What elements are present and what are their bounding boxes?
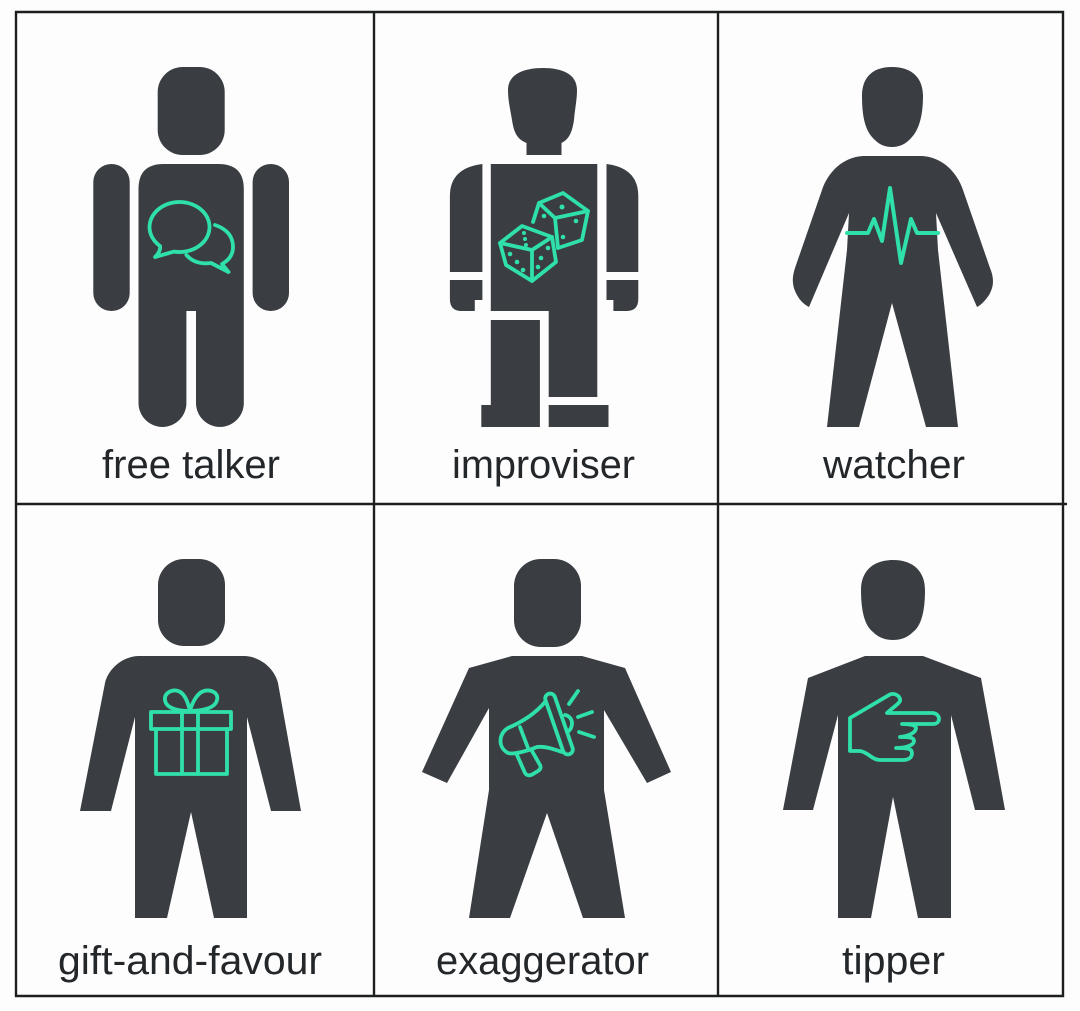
panel: gift-and-favour: [17, 505, 373, 995]
figure: gift-and-favour silhouette: [80, 559, 301, 918]
figure: tipper silhouette: [783, 560, 1005, 918]
label: watcher: watcher: [822, 443, 965, 487]
figure: free talker silhouette: [93, 67, 289, 427]
icon: pointing hand: [850, 694, 939, 760]
panel: watcher: [719, 13, 1062, 503]
figure: improviser silhouette: [450, 68, 638, 427]
icon: megaphone: [500, 691, 594, 775]
panel: tipper: [719, 505, 1062, 995]
figure: exaggerator silhouette: [422, 559, 671, 918]
label: improviser: improviser: [452, 443, 635, 487]
label: tipper: tipper: [842, 939, 945, 983]
label: exaggerator: exaggerator: [436, 939, 649, 983]
panel: free talker: [17, 13, 373, 503]
icon: dice: [500, 193, 588, 281]
label: gift-and-favour: gift-and-favour: [58, 939, 322, 983]
panel: exaggerator: [375, 505, 717, 995]
icon: heartbeat line: [847, 188, 938, 263]
icon: speech bubbles: [150, 202, 233, 272]
icon: gift box: [151, 690, 231, 774]
label: free talker: free talker: [102, 443, 280, 487]
panel: improviser: [375, 13, 717, 503]
figure: watcher silhouette: [793, 67, 993, 427]
